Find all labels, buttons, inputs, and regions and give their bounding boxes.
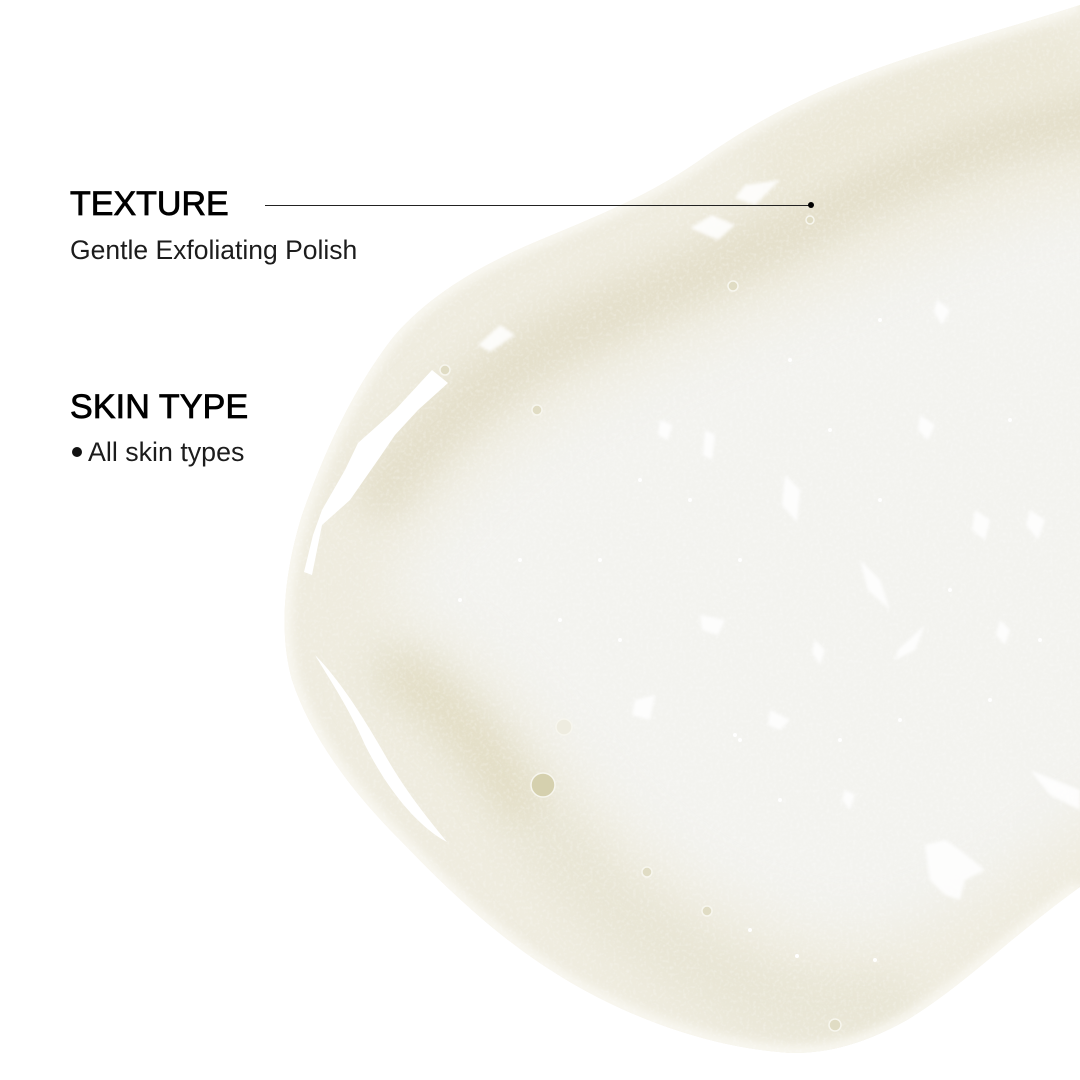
speckle texture	[321, 41, 1080, 1039]
text: texture description: Gentle Exfoliating Polish	[70, 235, 357, 265]
text: skin type bullet: All skin types	[88, 437, 244, 467]
small white flecks	[458, 318, 1042, 962]
heading: texture: TEXTURE	[70, 185, 229, 223]
bubbles	[429, 216, 841, 1031]
glossy highlights	[304, 370, 448, 842]
centre of swatch	[385, 190, 1080, 935]
cream swatch	[284, 5, 1080, 1053]
heading: skin type: SKIN TYPE	[70, 388, 248, 426]
pale outer edge	[285, 5, 1080, 1053]
swatch base	[284, 5, 1080, 1053]
soft white patches	[478, 180, 1080, 900]
beige rim bands	[385, 60, 1080, 1009]
